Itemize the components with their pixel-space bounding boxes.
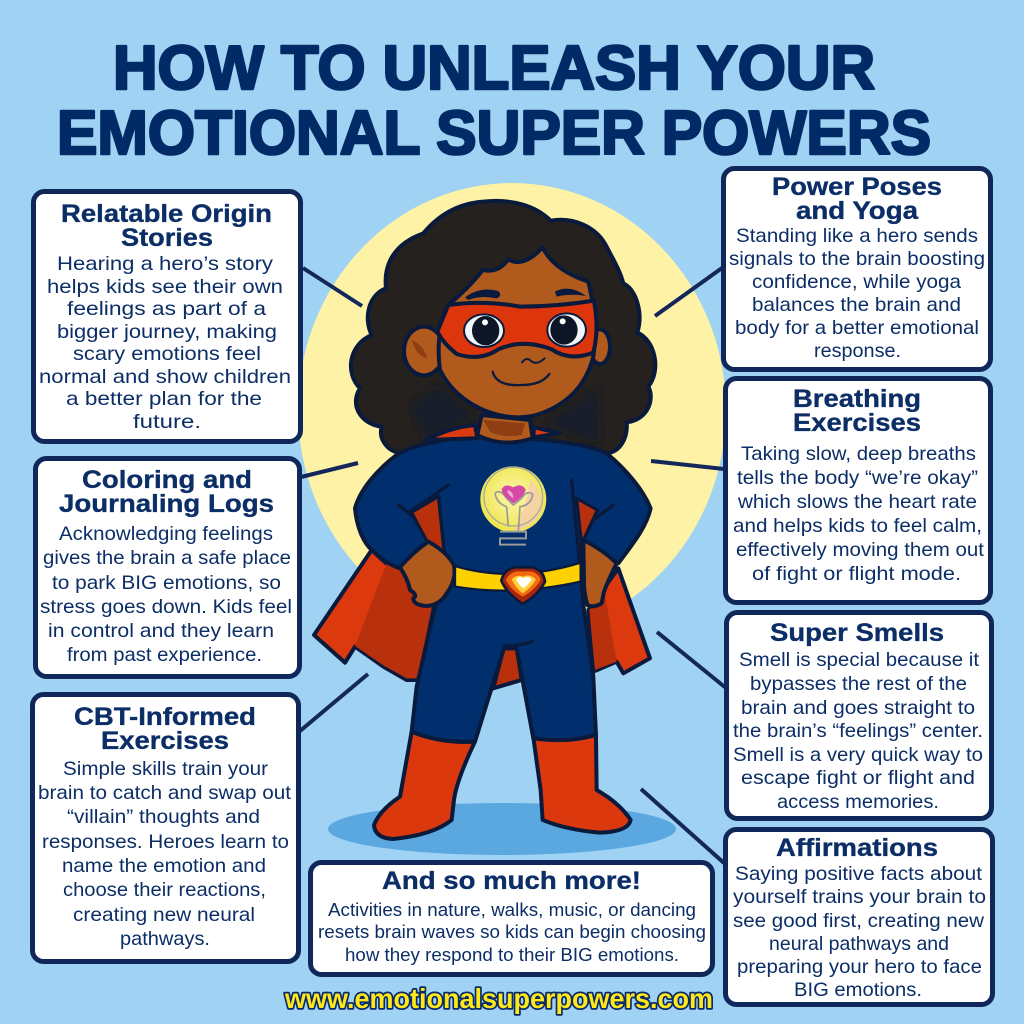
body text: to park BIG emotions, so [52, 572, 281, 594]
body text: helps kids see their own [47, 276, 283, 298]
panel: Super Smells [726, 612, 992, 818]
body text: feelings as part of a [67, 298, 266, 320]
heading [61, 200, 272, 252]
body text: scary emotions feel [73, 343, 261, 365]
heading: Stories [121, 224, 213, 252]
nose [522, 358, 545, 363]
body text: Smell is a very quick way to [733, 744, 983, 766]
panel: And so much more [310, 862, 712, 974]
left cape [314, 550, 433, 680]
face [439, 247, 595, 417]
cape collar [426, 425, 560, 440]
body text: brain to catch and swap out [38, 782, 292, 804]
body text: how they respond to their BIG emotions. [345, 945, 679, 965]
body text: creating new neural [73, 904, 255, 926]
body text: the brain’s “feelings” center. [733, 720, 983, 742]
right hand [583, 540, 617, 606]
body text: response. [814, 340, 901, 362]
left eye [464, 314, 504, 347]
suit creases [398, 480, 613, 646]
panel: Affirmations [726, 830, 992, 1004]
heading: Journaling Logs [59, 490, 274, 518]
heading: Relatable Origin [61, 200, 272, 228]
body text: a better plan for the [66, 388, 262, 410]
right ear [590, 329, 610, 364]
neck [477, 415, 533, 443]
cape showing through arm gaps [412, 497, 597, 552]
heading: And so much more! [382, 867, 641, 895]
body text: from past experience. [67, 644, 262, 666]
panel: Power Poses and Yoga [724, 168, 990, 370]
body text: which slows the heart rate [737, 491, 977, 513]
body text: BIG emotions. [794, 979, 922, 1001]
body text: gives the brain a safe place [43, 547, 291, 569]
body text: bigger journey, making [57, 321, 277, 343]
panel: Coloring and Journaling Logs [36, 458, 300, 676]
right cape [588, 568, 650, 673]
website URL: www.emotionalsuperpowers.com [284, 983, 713, 1014]
heading: Exercises [793, 409, 921, 437]
body text: Standing like a hero sends [736, 225, 978, 247]
heading: Exercises [101, 727, 229, 755]
body text: Saying positive facts about [735, 863, 983, 885]
body text: “villain” thoughts and [67, 806, 260, 828]
heading: Affirmations [776, 834, 938, 862]
body text: signals to the brain boosting [729, 248, 985, 270]
body text [733, 863, 986, 1001]
body text: in control and they learn [48, 620, 274, 642]
body text: body for a better emotional [735, 317, 979, 339]
superhero girl illustration [314, 201, 676, 855]
yellow sun circle [298, 183, 726, 637]
body text: bypasses the rest of the [750, 673, 967, 695]
body text [40, 523, 292, 666]
title: EMOTIONAL SUPER POWERS [57, 99, 931, 168]
body text: resets brain waves so kids can begin choosing [318, 922, 706, 942]
heading: and Yoga [796, 197, 919, 225]
left hand [400, 542, 455, 606]
body text: Hearing a hero’s story [57, 253, 273, 275]
light bulb with heart [480, 466, 546, 545]
body text: confidence, while yoga [752, 271, 961, 293]
body text: yourself trains your brain to [733, 886, 986, 908]
body, cape and boots [314, 435, 651, 839]
body text: preparing your hero to face [737, 956, 982, 978]
red mask [437, 301, 596, 357]
body text [733, 649, 983, 813]
cape between legs [493, 647, 522, 688]
heading: Power Poses [772, 173, 942, 201]
body text [318, 900, 706, 965]
body text: Taking slow, deep breaths [741, 443, 976, 465]
connector lines [300, 268, 726, 863]
heading: Breathing [793, 385, 921, 413]
body text: Simple skills train your [63, 758, 269, 780]
yellow belt [455, 563, 581, 591]
body text: Activities in nature, walks, music, or dancing [328, 900, 696, 920]
heading: CBT-Informed [74, 703, 256, 731]
body text [733, 443, 985, 585]
body text: Acknowledging feelings [59, 523, 273, 545]
body text [729, 225, 985, 362]
panel: CBT-Informed Exercises [32, 694, 298, 962]
heading: Super Smells [770, 619, 944, 647]
body text: name the emotion and [62, 855, 266, 877]
panel: Relatable Origin Stories [34, 192, 300, 442]
navy suit [355, 435, 651, 742]
body text: choose their reactions, [63, 879, 266, 901]
body text: see good first, creating new [733, 910, 985, 932]
ground shadow [328, 803, 676, 855]
right eye [547, 313, 586, 347]
heart buckle [501, 567, 545, 604]
body text: responses. Heroes learn to [42, 831, 289, 853]
body text: escape fight or flight and [741, 767, 975, 789]
body text [39, 253, 291, 433]
body text: Smell is special because it [739, 649, 980, 671]
title: HOW TO UNLEASH YOUR [113, 34, 875, 103]
body text: access memories. [777, 791, 939, 813]
body text: normal and show children [39, 366, 291, 388]
title [57, 34, 931, 168]
body text [38, 758, 292, 950]
body text: effectively moving them out [736, 539, 985, 561]
body text: future. [133, 411, 201, 433]
smile [493, 372, 549, 385]
left ear [404, 327, 444, 375]
heading [772, 173, 942, 225]
body text: balances the brain and [752, 294, 961, 316]
heading [59, 466, 274, 518]
body text: of fight or flight mode. [752, 563, 961, 585]
body text: tells the body “we’re okay” [737, 467, 978, 489]
head and face [404, 247, 610, 443]
heading: Coloring and [82, 466, 252, 494]
body text: brain and goes straight to [741, 697, 975, 719]
body text: and helps kids to feel calm, [733, 515, 982, 537]
body text: pathways. [120, 928, 210, 950]
heading [793, 385, 921, 437]
boots [374, 732, 631, 839]
hair [351, 201, 655, 460]
body text: neural pathways and [769, 933, 949, 955]
heading [74, 703, 256, 755]
body text: stress goes down. Kids feel [40, 596, 292, 618]
eyebrows [465, 289, 586, 300]
panel: Breathing Exercises [726, 378, 990, 602]
